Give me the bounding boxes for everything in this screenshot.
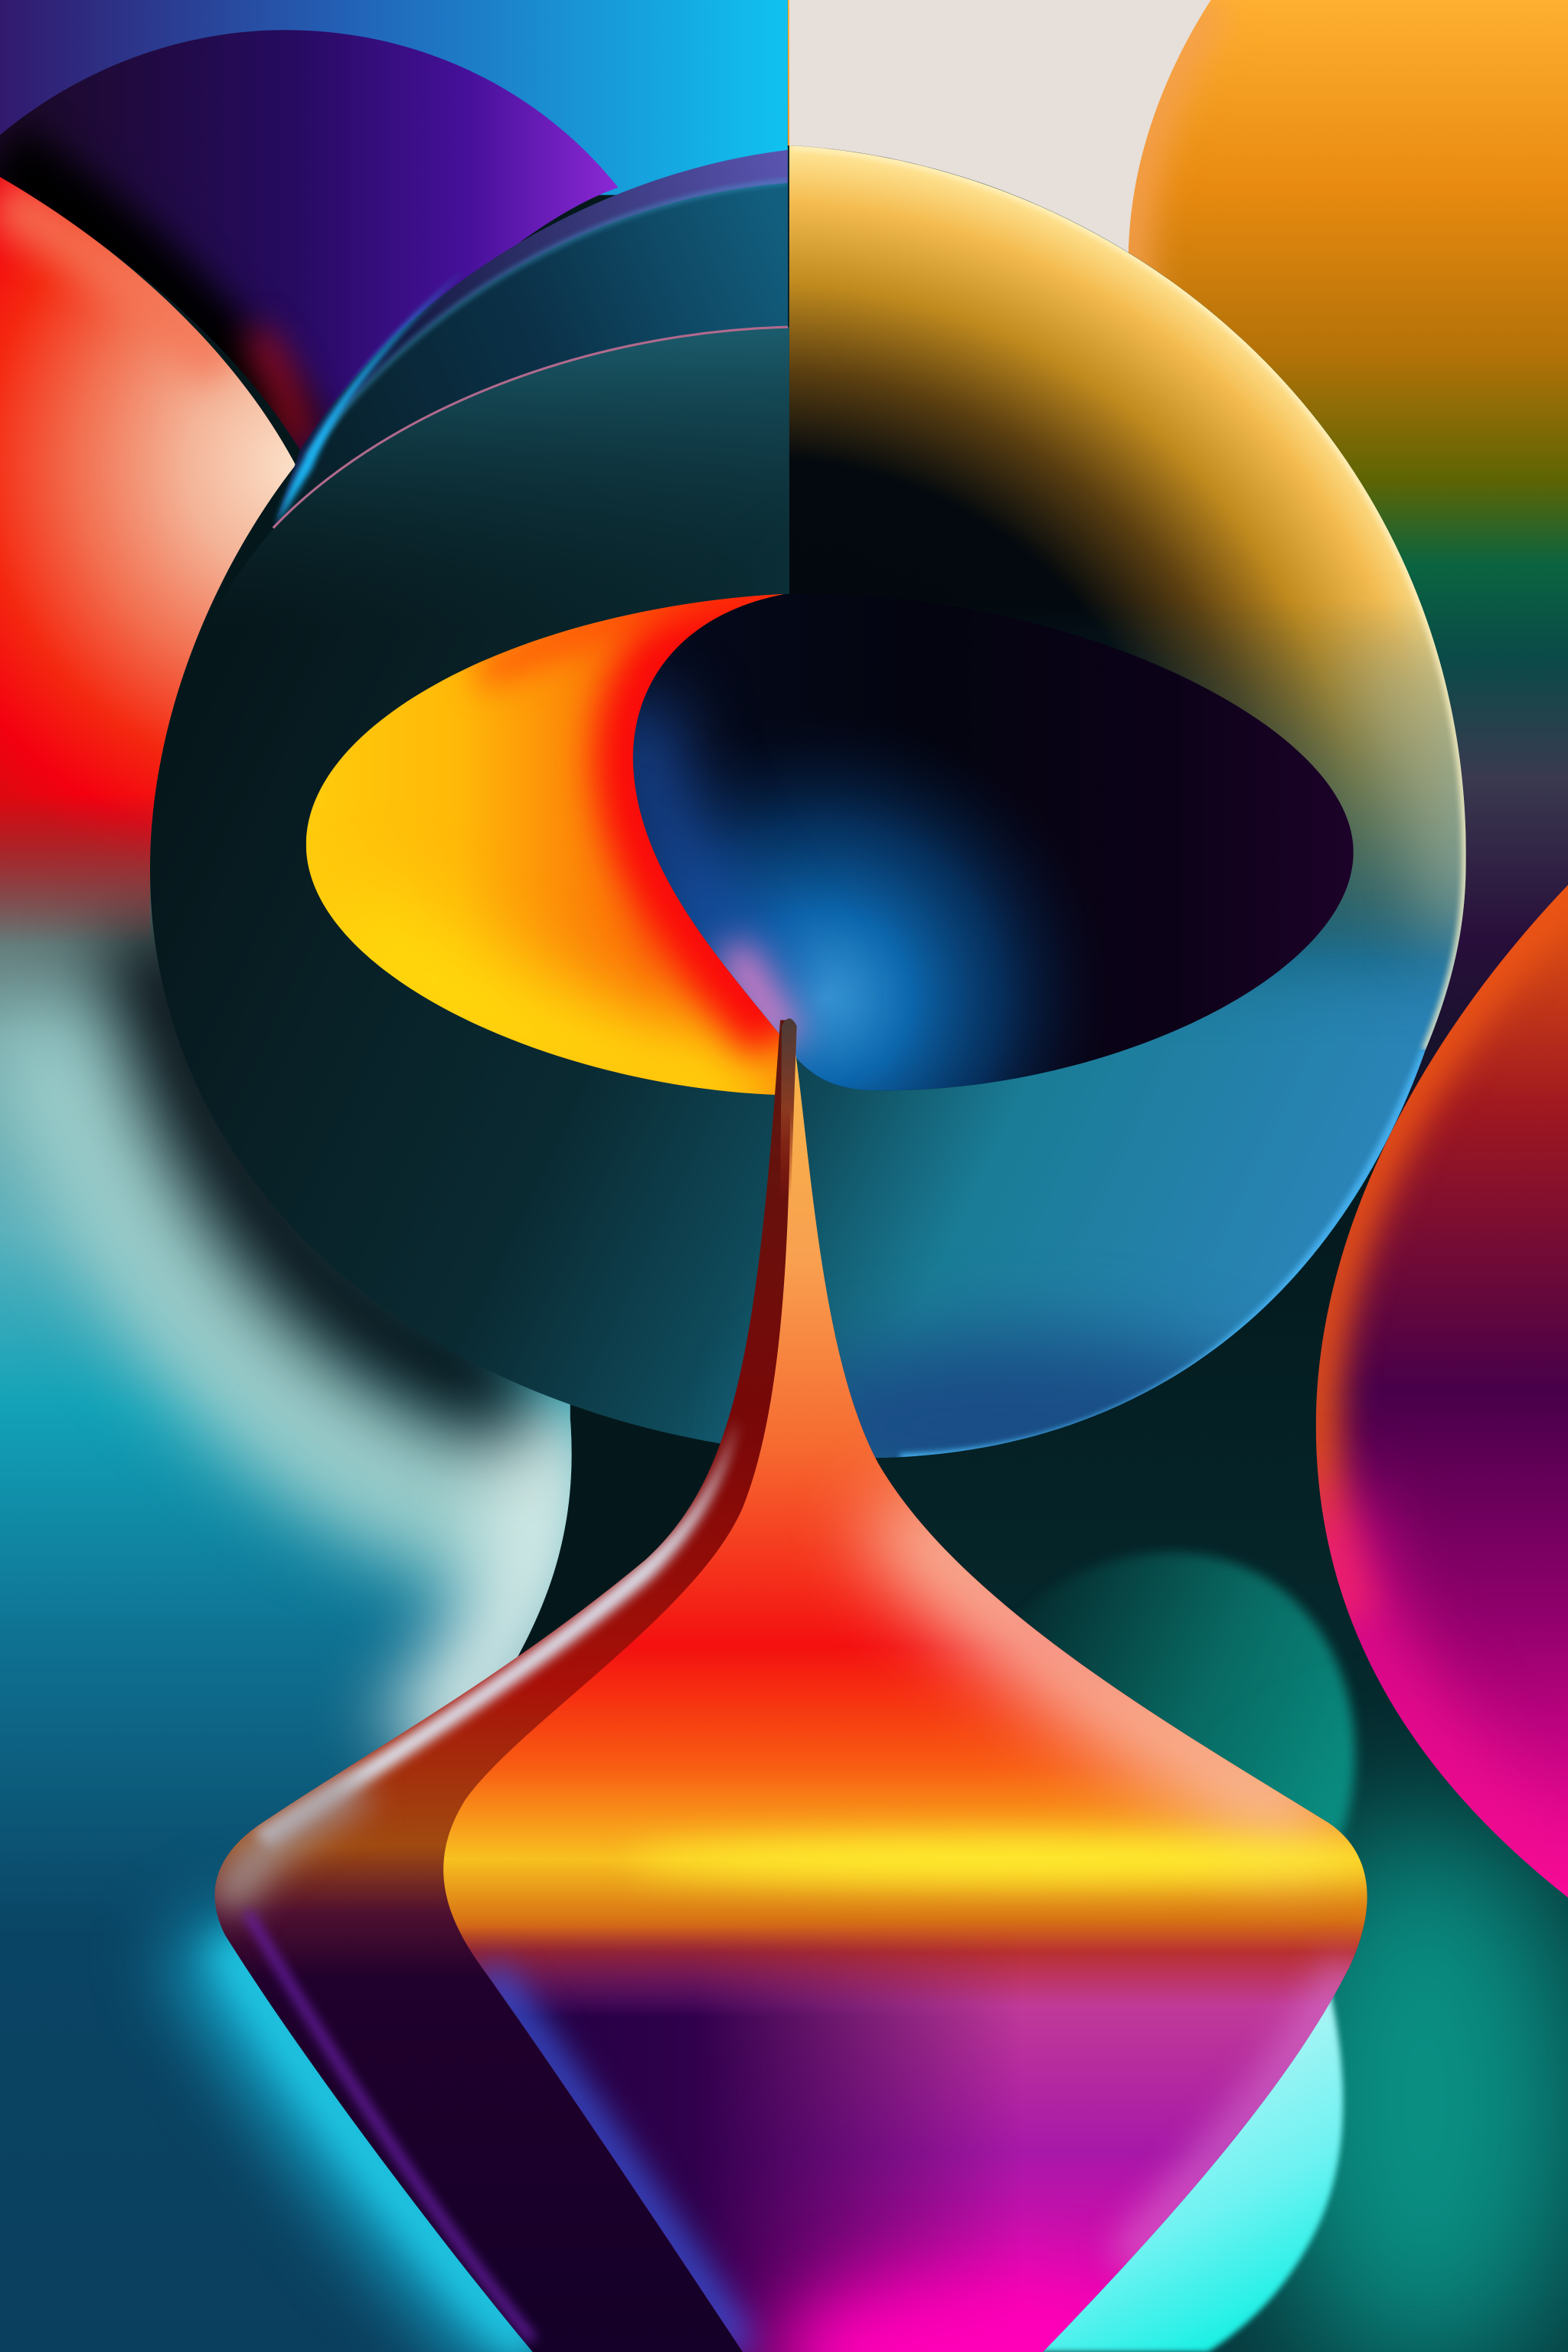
shape: right magenta lobe (1305, 877, 1568, 1913)
shape: golden upper right of sphere (789, 135, 1479, 1065)
shape: left red fan (0, 177, 296, 937)
highlight: cyan glow at crescent tip (276, 270, 466, 525)
shape: orange glow on blob edge (1129, 0, 1230, 280)
large sphere body (135, 135, 1485, 1515)
panel: top left blue band (0, 0, 788, 195)
spinning top: front right part (420, 1005, 1410, 2352)
panel: beige top block (789, 0, 1211, 263)
shape: teal lower right wash (1260, 1815, 1568, 2352)
panel: teal glow bottom right (960, 1553, 1355, 1950)
panel: left teal and pale field (0, 750, 572, 2352)
panel: right side orange to teal field (788, 0, 1568, 2352)
eye: dark right lobe (632, 594, 1354, 1090)
shape: inner teal crescent band (273, 183, 788, 528)
eye: yellow left lobe (300, 585, 795, 1102)
shape: purple dome (0, 30, 619, 450)
highlight: pink rim on body top (273, 327, 788, 528)
shape: upper blue crescent band (273, 150, 788, 528)
spinning top: back left part (195, 1005, 1396, 2352)
shape: cyan blob bottom right (1035, 1988, 1343, 2352)
spinning top: dark stem tip (780, 1018, 797, 1200)
highlight: cyan rim on crescent (308, 181, 788, 458)
